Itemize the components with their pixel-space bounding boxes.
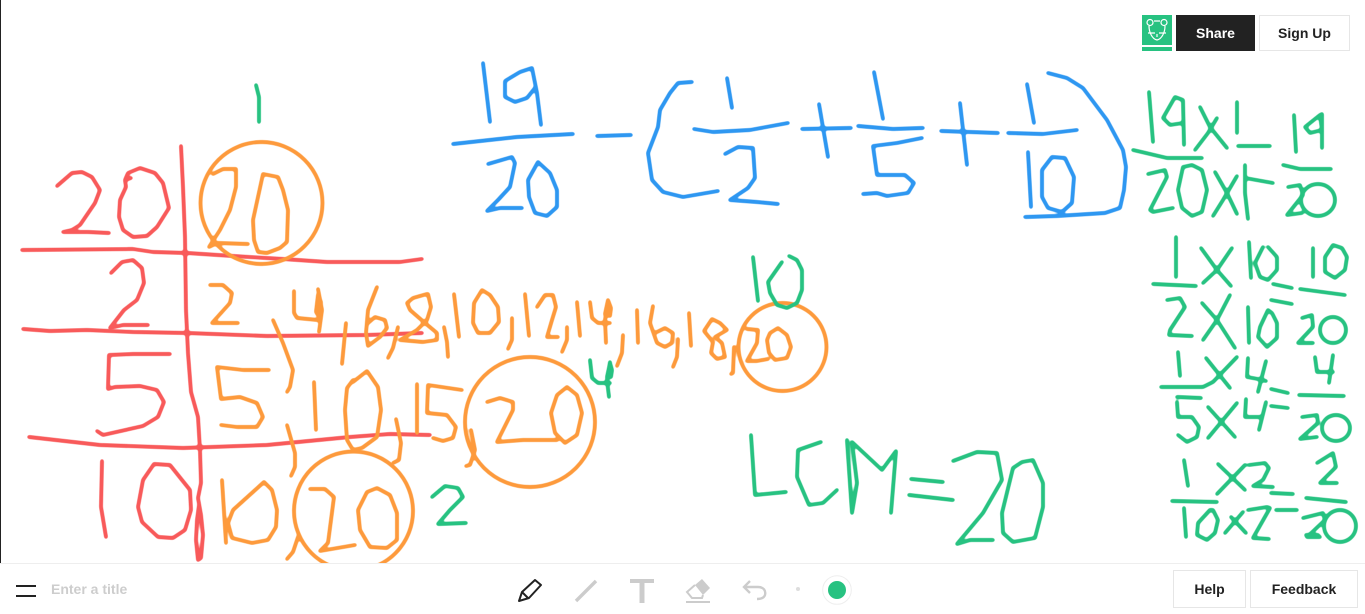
green conversion: 1x10/2x10 = 10/20 xyxy=(1153,237,1347,348)
icon: line xyxy=(576,581,596,601)
icon: pencil xyxy=(519,580,541,601)
feedback button: Feedback xyxy=(1272,581,1336,597)
green conversion: 19x1/20x1 = 19/20 xyxy=(1133,92,1335,219)
orange multiples of 2 xyxy=(210,285,826,392)
menu icon xyxy=(16,585,36,597)
red division table lines xyxy=(22,146,430,560)
orange multiples of 10 xyxy=(222,452,413,570)
share button: Share xyxy=(1196,25,1235,41)
sign up button: Sign Up xyxy=(1278,25,1331,41)
orange multiples of 5 xyxy=(217,357,595,487)
blue equation xyxy=(453,63,1126,217)
red divisors: 20, 2, 5, 10 xyxy=(57,168,191,538)
feedback button xyxy=(1250,570,1358,608)
green conversion: 1x4/5x4 = 4/20 xyxy=(1161,352,1350,442)
sign up button xyxy=(1259,15,1350,51)
icon: text xyxy=(630,579,654,603)
icon: undo xyxy=(744,581,765,599)
bottom toolbar xyxy=(0,563,1365,614)
title placeholder: Enter a title xyxy=(51,581,127,597)
help button: Help xyxy=(1194,581,1225,597)
colour picker xyxy=(823,576,851,604)
green quotient labels: 1, 4, 2, 10 xyxy=(256,85,802,524)
green LCM = 20 xyxy=(751,435,1043,544)
left window edge xyxy=(0,0,1,563)
green conversion: 1x2/10x2 = 2/20 xyxy=(1172,453,1356,542)
icon: eraser xyxy=(686,579,710,603)
brush size dot xyxy=(796,587,800,591)
share button xyxy=(1176,15,1255,51)
help button xyxy=(1173,570,1246,608)
top right: logo icon xyxy=(1142,15,1172,51)
tool icons xyxy=(518,576,852,604)
orange multiples of 20 with circle xyxy=(200,142,322,264)
